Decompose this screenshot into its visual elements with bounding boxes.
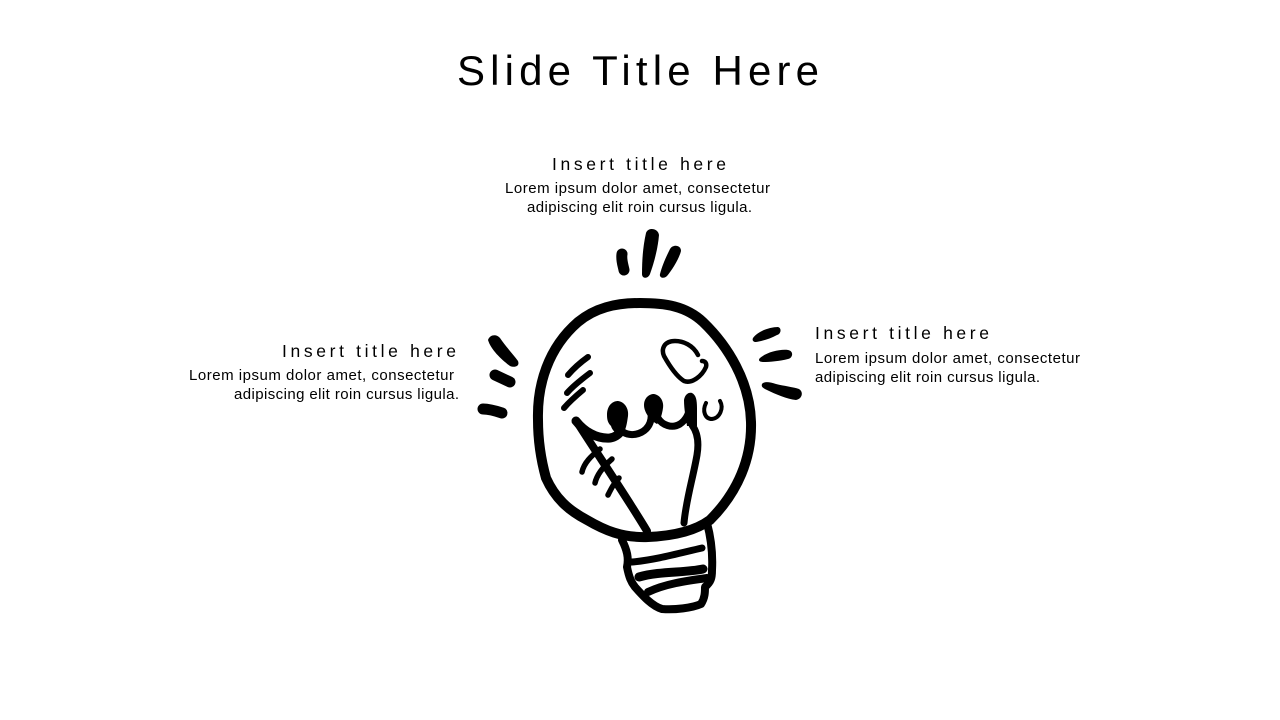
text block: top: Lorem ipsum dolor amet, consectetur — [505, 180, 770, 197]
text block: left — [189, 341, 459, 403]
text block: right: adipiscing elit roin cursus ligula. — [815, 369, 1040, 386]
text block: left: Lorem ipsum dolor amet, consectetur — [189, 367, 454, 384]
rays: right — [753, 327, 802, 400]
icon: hand-drawn light bulb — [483, 229, 802, 609]
text block: top — [505, 154, 770, 216]
bulb glass outline — [538, 303, 751, 537]
text block: top: Insert title here — [552, 154, 726, 174]
text block: left: adipiscing elit roin cursus ligula. — [234, 386, 459, 403]
filament — [576, 401, 722, 531]
title: Slide Title Here — [457, 47, 819, 94]
text block: left: Insert title here — [282, 341, 456, 361]
text block: top: adipiscing elit roin cursus ligula. — [527, 199, 752, 216]
filament coil blobs — [607, 393, 697, 434]
text block: right — [815, 323, 1080, 386]
screw base — [622, 523, 712, 609]
rays: left — [483, 335, 518, 413]
rays: top — [622, 229, 681, 278]
highlight ring — [663, 341, 706, 382]
highlight strokes — [564, 357, 590, 408]
text block: right: Insert title here — [815, 323, 989, 343]
text block: right: Lorem ipsum dolor amet, consectetur — [815, 350, 1080, 367]
